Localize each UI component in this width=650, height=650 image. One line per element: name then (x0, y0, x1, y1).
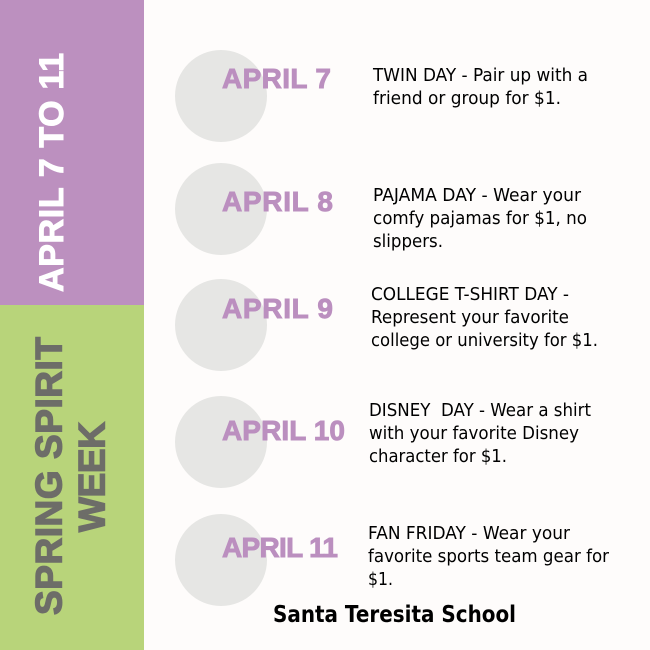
description: FAN FRIDAY - Wear your (368, 523, 571, 544)
description (372, 65, 588, 109)
date label: APRIL 8 (222, 186, 333, 217)
description: with your favorite Disney (369, 423, 579, 444)
description: $1. (368, 569, 393, 590)
panel: green sidebar (0, 305, 144, 650)
icon: circle (175, 396, 267, 488)
description: COLLEGE T-SHIRT DAY - (371, 284, 569, 305)
description: college or university for $1. (371, 330, 598, 351)
panel: purple sidebar (0, 0, 144, 305)
description: TWIN DAY - Pair up with a (372, 65, 588, 86)
description: PAJAMA DAY - Wear your (373, 185, 582, 206)
row: April 9 (175, 279, 598, 371)
date label: APRIL 7 (222, 63, 331, 94)
heading: date range: APRIL 7 TO 11 (33, 53, 71, 292)
description: favorite sports team gear for (368, 546, 610, 567)
date label: APRIL 11 (222, 532, 338, 563)
footer: school name: Santa Teresita School (273, 602, 516, 628)
description (371, 284, 598, 351)
icon: circle (175, 514, 267, 606)
icon: circle (175, 163, 267, 255)
description: friend or group for $1. (373, 88, 561, 109)
date label: APRIL 9 (222, 293, 333, 324)
description: DISNEY DAY - Wear a shirt (369, 400, 591, 421)
icon: circle (175, 50, 267, 142)
date label: APRIL 10 (222, 415, 345, 446)
heading: spring spirit week (28, 337, 112, 615)
row: April 11 (175, 514, 610, 606)
heading: spring spirit week: WEEK (72, 422, 112, 532)
description: slippers. (373, 231, 443, 252)
row: April 7 (175, 50, 588, 142)
row: April 10 (175, 396, 591, 488)
description (369, 400, 591, 467)
icon: circle (175, 279, 267, 371)
description (373, 185, 587, 252)
description (368, 523, 610, 590)
heading: spring spirit week: SPRING SPIRIT (28, 337, 70, 615)
description: Represent your favorite (371, 307, 569, 328)
description: comfy pajamas for $1, no (373, 208, 587, 229)
description: character for $1. (369, 446, 507, 467)
row: April 8 (175, 163, 587, 255)
